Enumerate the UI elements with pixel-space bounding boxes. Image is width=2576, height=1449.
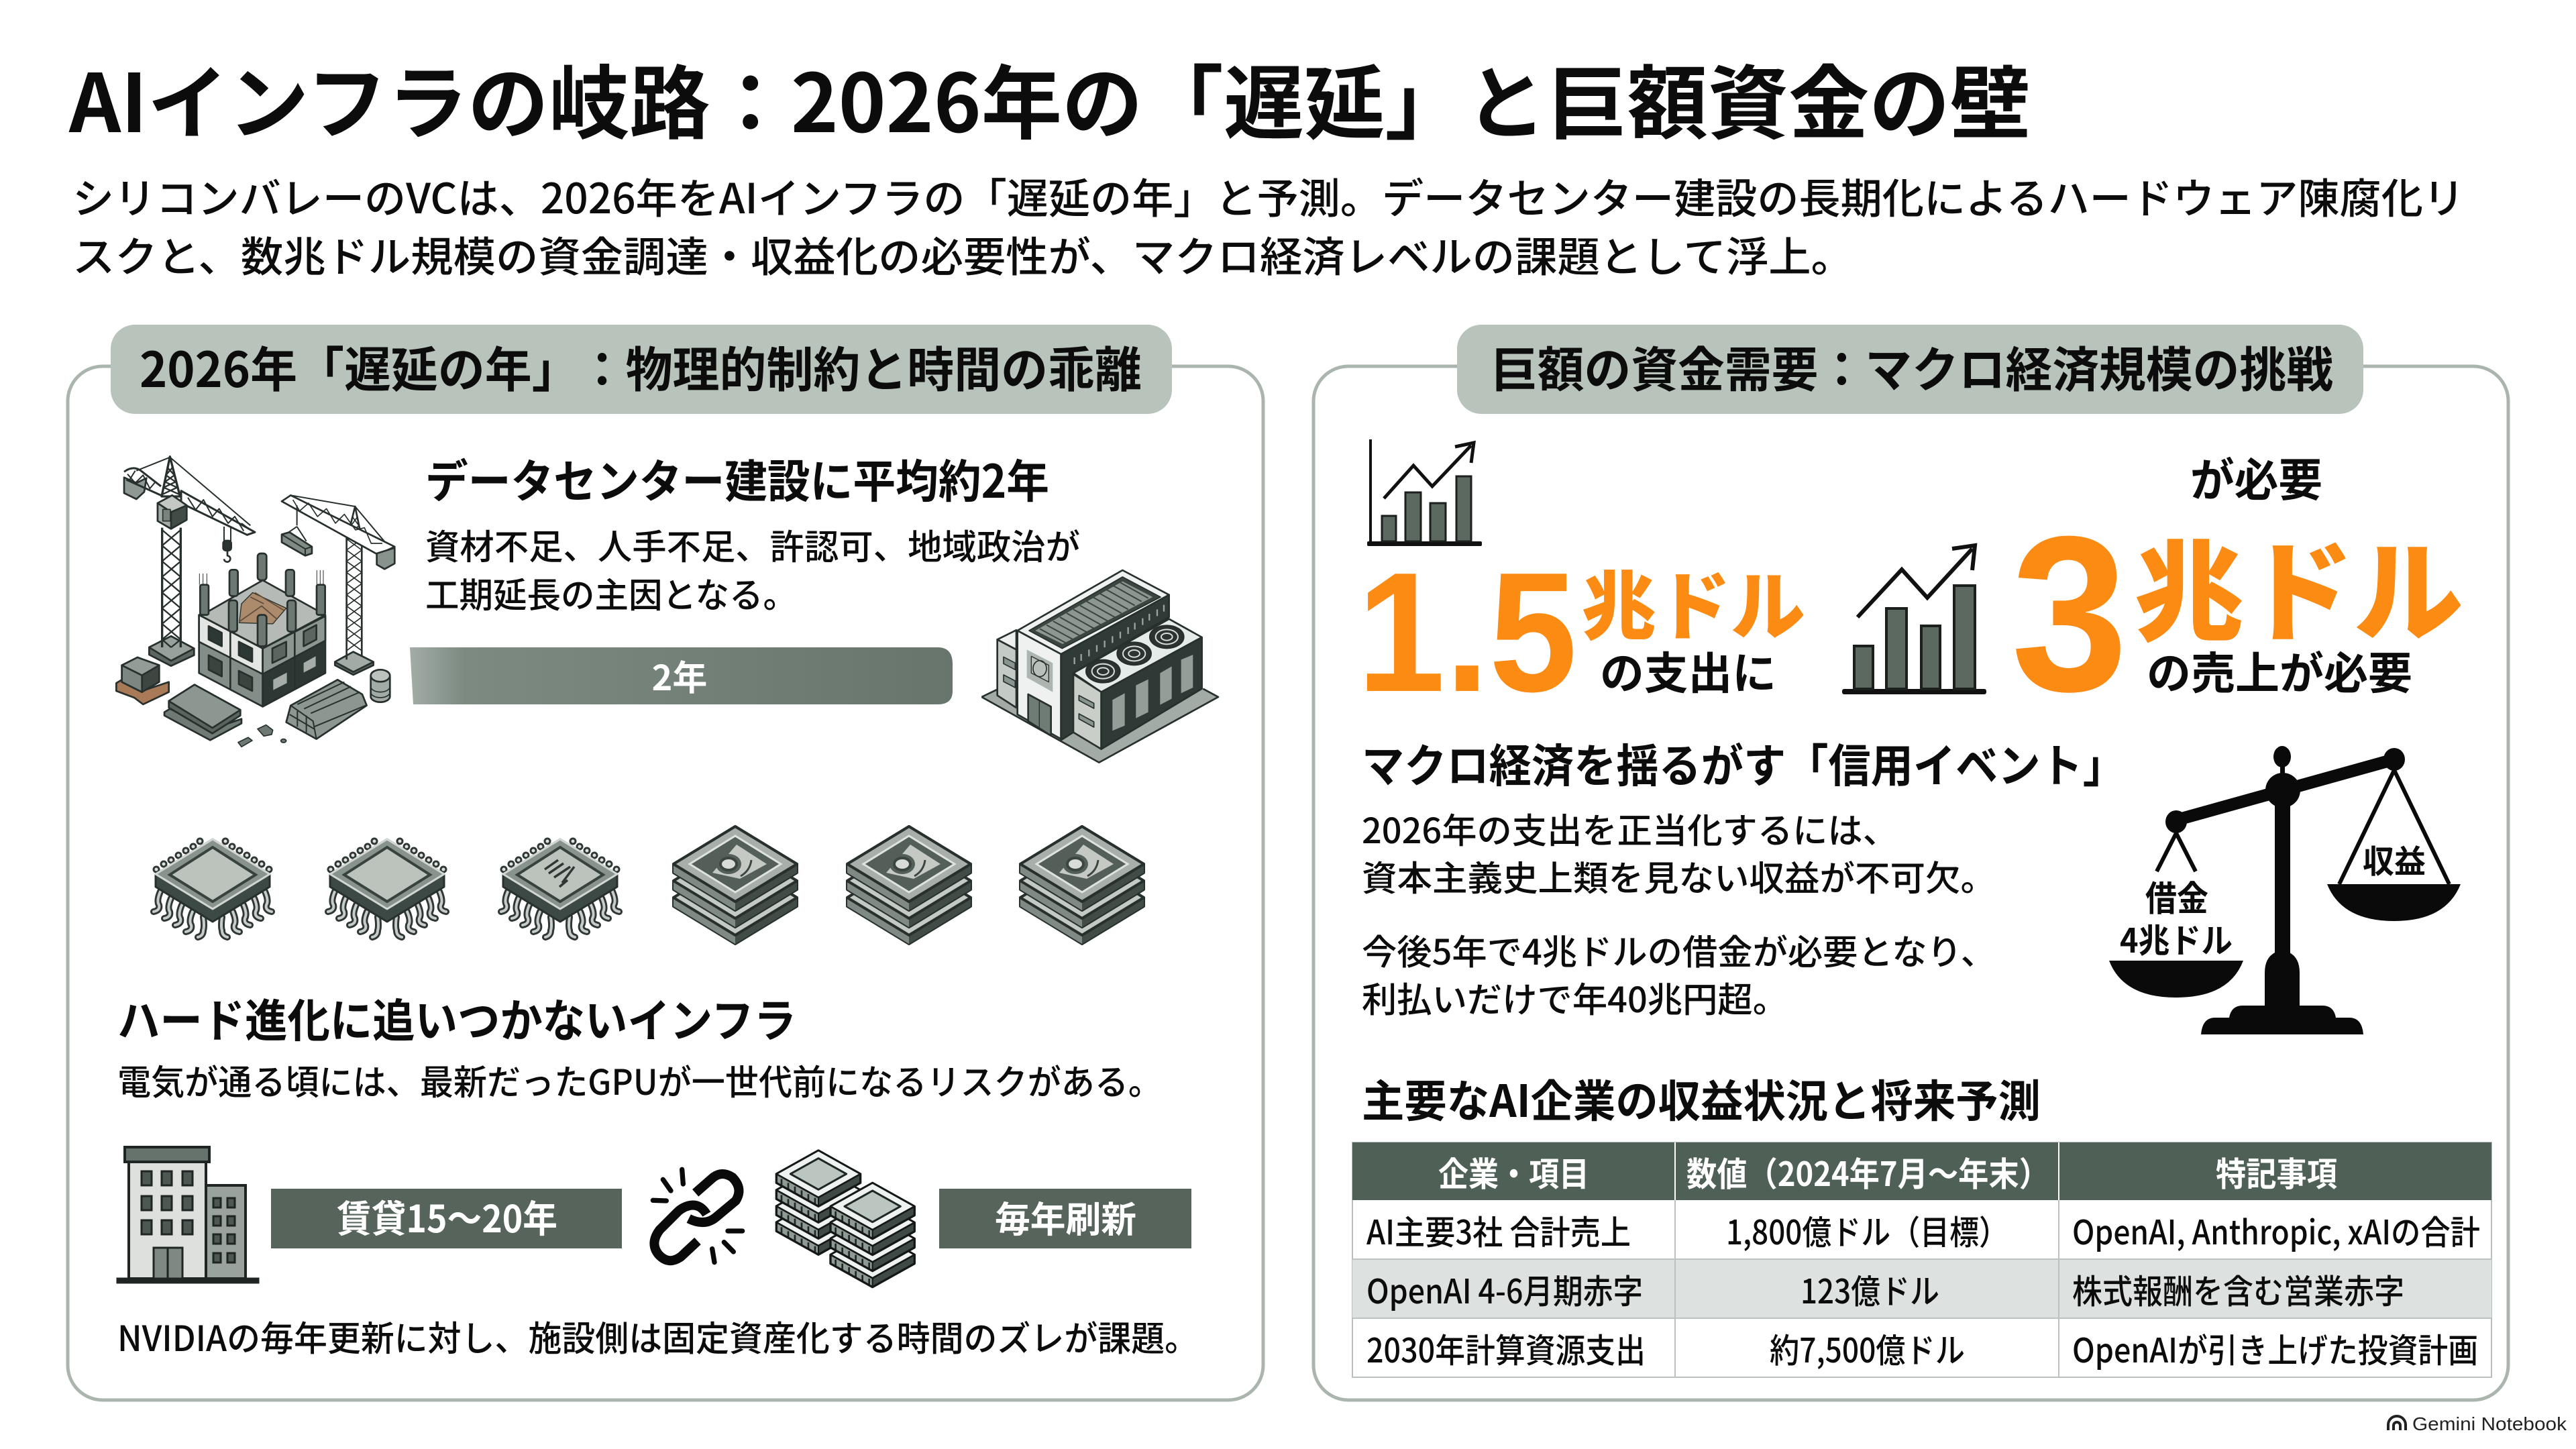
text: needed: が必要 [2190,443,2322,510]
table row 2 [1366,1265,2404,1313]
table row 1: AI主要3社 合計売上 [1366,1206,1631,1254]
table row 1: OpenAI, Anthropic, xAIの合計 [2072,1206,2480,1254]
table row 3: OpenAIが引き上げた投資計画 [2072,1324,2478,1373]
subheading: construction: データセンター建設に平均約2年 [425,445,1049,511]
table row 1: 1,800億ドル（目標） [1726,1206,2008,1254]
concrete block building [199,553,325,706]
stat: 3 trillion dollars revenue: 3 [2011,490,2128,737]
icon: spending chart [1367,439,1482,546]
stat: 3 trillion dollars revenue [2011,490,2463,737]
icon: server stacks [776,1150,914,1287]
timeline bar: 2 years [410,647,953,704]
table: AI company revenue [1352,1142,2491,1377]
text: debt interest: 利払いだけで年40兆円超。 [1362,972,1788,1022]
stat: 3 trillion dollars revenue: 兆ドル [2135,505,2463,664]
table row 2: 123億ドル [1801,1265,1939,1313]
panel: left [68,325,1263,1400]
heading pill: capital demand: 巨額の資金需要：マクロ経済規模の挑戦 [1491,331,2333,401]
label: lease term: 賃貸15〜20年 [337,1189,557,1244]
intro text: シリコンバレーのVCは、2026年をAIインフラの「遅延の年」と予測。データセンター建設の長期化によるハードウェア陳腐化リ [72,165,2465,225]
icon: construction site [116,457,394,747]
table header [1438,1148,2337,1196]
table row 2: 株式報酬を含む営業赤字 [2072,1265,2404,1313]
text: delay causes [425,519,1080,618]
label: revenue: 収益 [2363,835,2426,882]
text: debt interest: 今後5年で4兆ドルの借金が必要となり、 [1362,924,1996,975]
text: GPU risk: 電気が通る頃には、最新だったGPUが一世代前になるリスクがある。 [117,1055,1162,1105]
table row 2: OpenAI 4-6月期赤字 [1366,1265,1643,1313]
label: debt: 4兆ドル [2120,914,2233,963]
intro text [72,165,2465,284]
crane 2 [282,495,394,675]
subheading: credit event: マクロ経済を揺るがす「信用イベント」 [1362,729,2125,796]
stat: 1.5 trillion dollars spending [1357,537,1805,727]
table row 3 [1366,1324,2478,1373]
text: revenue justification: 2026年の支出を正当化するには、 [1362,803,1898,853]
table row 1 [1366,1206,2480,1254]
stat: 1.5 trillion dollars spending: の支出に [1600,638,1776,702]
label: debt: 借金 [2145,871,2208,921]
icon: revenue chart [1842,545,1986,694]
stat: 1.5 trillion dollars spending: 1.5 [1357,537,1577,727]
stat: 3 trillion dollars revenue: の売上が必要 [2147,638,2412,702]
intro text: スクと、数兆ドル規模の資金調達・収益化の必要性が、マクロ経済レベルの課題として浮上。 [72,223,1854,284]
icon: broken chain [653,1169,743,1263]
table header: 数値（2024年7月〜年末） [1686,1148,2049,1196]
panel: right [1313,325,2508,1400]
subheading: table: 主要なAI企業の収益状況と将来予測 [1362,1066,2041,1130]
table row 3: 2030年計算資源支出 [1366,1324,1646,1373]
label: annual refresh [939,1189,1191,1248]
subheading: infrastructure: ハード進化に追いつかないインフラ [117,984,796,1051]
label: lease term [271,1189,622,1248]
table header: 企業・項目 [1438,1148,1589,1196]
text: revenue justification: 資本主義史上類を見ない収益が不可欠。 [1362,851,1996,901]
text: time gap: NVIDIAの毎年更新に対し、施設側は固定資産化する時間のズレが課題。 [117,1311,1198,1361]
text: debt interest [1362,924,1996,1022]
icon: office building [117,1147,258,1283]
timeline bar: 2 years: 2年 [652,650,707,700]
table row 3: 約7,500億ドル [1770,1324,1965,1373]
icon: data center building [981,570,1218,763]
label: annual refresh: 毎年刷新 [995,1190,1136,1243]
crane 1 [124,457,255,666]
title: AIインフラの岐路：2026年の「遅延」と巨額資金の壁 [68,39,2031,156]
stat: 1.5 trillion dollars spending: 兆ドル [1582,547,1805,655]
footer watermark: Gemini Notebook [2412,1413,2567,1434]
heading pill: delay year: 2026年「遅延の年」：物理的制約と時間の乖離 [140,331,1142,401]
materials [116,657,390,747]
icons: GPU chips row [154,826,1144,944]
text: delay causes: 工期延長の主因となる。 [425,568,797,618]
text: revenue justification [1362,803,1996,901]
label: debt [2120,871,2233,963]
table header: 特記事項 [2216,1148,2337,1196]
icon: balance scale [2109,746,2461,1034]
text: delay causes: 資材不足、人手不足、許認可、地域政治が [425,519,1080,570]
